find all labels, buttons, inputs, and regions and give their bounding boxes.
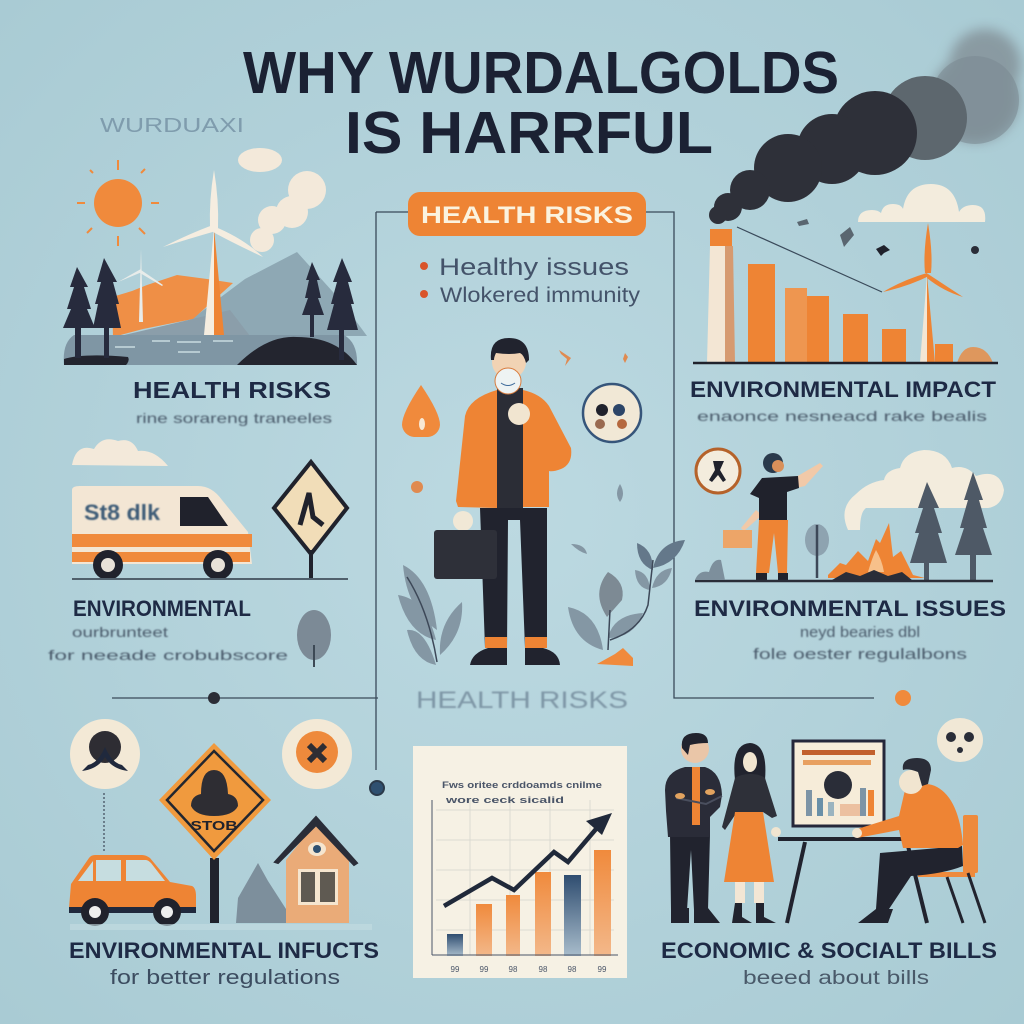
plants: [398, 484, 685, 665]
bar chart: [748, 264, 993, 363]
bars: [447, 934, 463, 956]
trees: [910, 472, 992, 580]
text: bills caption: beeed about bills: [743, 968, 929, 989]
heading: environmental left: ENVIRONMENTAL: [73, 596, 251, 621]
axis labels: 99: [451, 965, 460, 974]
icon: turbine: [883, 223, 963, 363]
panel: center health risks badge: [408, 192, 646, 236]
panel: fire and person: [695, 449, 1004, 581]
icon: fire: [828, 523, 925, 580]
text: environmental left caption: ourbrunteet: [72, 624, 168, 640]
icon: sun: [77, 160, 159, 246]
axis labels: 98: [509, 965, 518, 974]
panel: center health risks badge: HEALTH RISKS: [421, 202, 633, 229]
text: impact caption: enaonce nesneacd rake bealis: [697, 408, 987, 424]
heading: environmental issues: ENVIRONMENTAL ISSUES: [694, 596, 1006, 621]
icon: stop sign: [159, 743, 271, 923]
axis labels: 99: [480, 965, 489, 974]
small flying specks: [797, 219, 979, 256]
heading: health risks center: HEALTH RISKS: [416, 687, 628, 714]
brand label: WURDUAXI: [100, 115, 244, 137]
axis labels: 99: [598, 965, 607, 974]
icon: man standing: [665, 733, 722, 923]
chart title: [442, 780, 602, 805]
text: issues caption: [753, 624, 967, 663]
person: [434, 338, 571, 665]
heading: environmental impact: ENVIRONMENTAL IMPACT: [690, 377, 997, 402]
clouds and smoke: [238, 148, 326, 252]
icon: stop sign: STOB: [190, 818, 238, 833]
icon: desk: [778, 839, 933, 923]
heading: environmental infects: ENVIRONMENTAL INFUCTS: [69, 938, 379, 963]
small flying specks: [411, 350, 628, 493]
icon: woman: [722, 743, 781, 923]
icon: van: [72, 486, 252, 580]
icon: rock: [236, 863, 286, 923]
icon: mask circle: [583, 384, 641, 442]
title: IS HARRFUL: [345, 100, 713, 166]
text: environmental left caption: [48, 624, 288, 663]
person pointing: [723, 453, 823, 580]
text: center bullets: [420, 254, 641, 307]
icon: warning circle: [696, 449, 740, 493]
axis labels: 98: [539, 965, 548, 974]
panel: line and bar chart: [413, 746, 627, 978]
text: for better regulations: for better regulations: [110, 967, 340, 989]
text: center bullets: Healthy issues: [439, 254, 629, 281]
icon: van: St8 dlk: [84, 500, 161, 525]
axis labels: [451, 965, 607, 974]
text: issues caption: fole oester regulalbons: [753, 646, 967, 663]
icon: house: [275, 817, 357, 923]
panel: van: [72, 439, 348, 667]
trees: [63, 258, 358, 360]
title: [243, 40, 839, 166]
icon: drop: [402, 385, 440, 437]
axis labels: 98: [568, 965, 577, 974]
text: issues caption: neyd bearies dbl: [800, 624, 920, 641]
smoke plume: [709, 29, 1021, 224]
panel: factory chart: [693, 184, 998, 363]
icon: small turbine: [118, 249, 163, 322]
icon: car: [69, 855, 196, 926]
icon: chimney: [707, 246, 725, 363]
title: WHY WURDALGOLDS: [243, 40, 839, 106]
icon: orange leaves: [597, 648, 633, 666]
cloud: [844, 450, 1004, 530]
connector lines: [112, 212, 911, 795]
chart title: wore ceck sicalid: [444, 795, 564, 805]
icon: wind turbine: [163, 170, 263, 335]
panel: people at desk: [665, 718, 985, 923]
trend arrow: [444, 822, 602, 906]
icon: ribbon circle: [70, 719, 140, 789]
icon: warning sign: [274, 462, 347, 578]
icon: skull: [937, 718, 983, 762]
heading: health risks left: HEALTH RISKS: [133, 377, 331, 403]
hills: [125, 252, 367, 336]
panel: central figure: [398, 338, 685, 666]
text: left caption: rine sorareng traneeles: [136, 410, 332, 426]
icon: monitor: [793, 741, 884, 826]
text: environmental left caption: for neeade crobubscore: [48, 647, 288, 663]
panel: top-left landscape: [63, 148, 367, 365]
small tree: [805, 524, 829, 578]
text: center bullets: Wlokered immunity: [440, 284, 641, 307]
chart title: Fws oritee crddoamds cnilme: [442, 780, 602, 790]
panel: bottom-left road sign: [69, 719, 372, 927]
heading: economic and social bills: ECONOMIC & SOCIALT BILLS: [661, 938, 997, 963]
icon: x circle: [282, 719, 352, 789]
icon: cloud: [858, 184, 985, 222]
icon: small tree: [297, 610, 331, 667]
icon: seated man: [852, 758, 985, 923]
